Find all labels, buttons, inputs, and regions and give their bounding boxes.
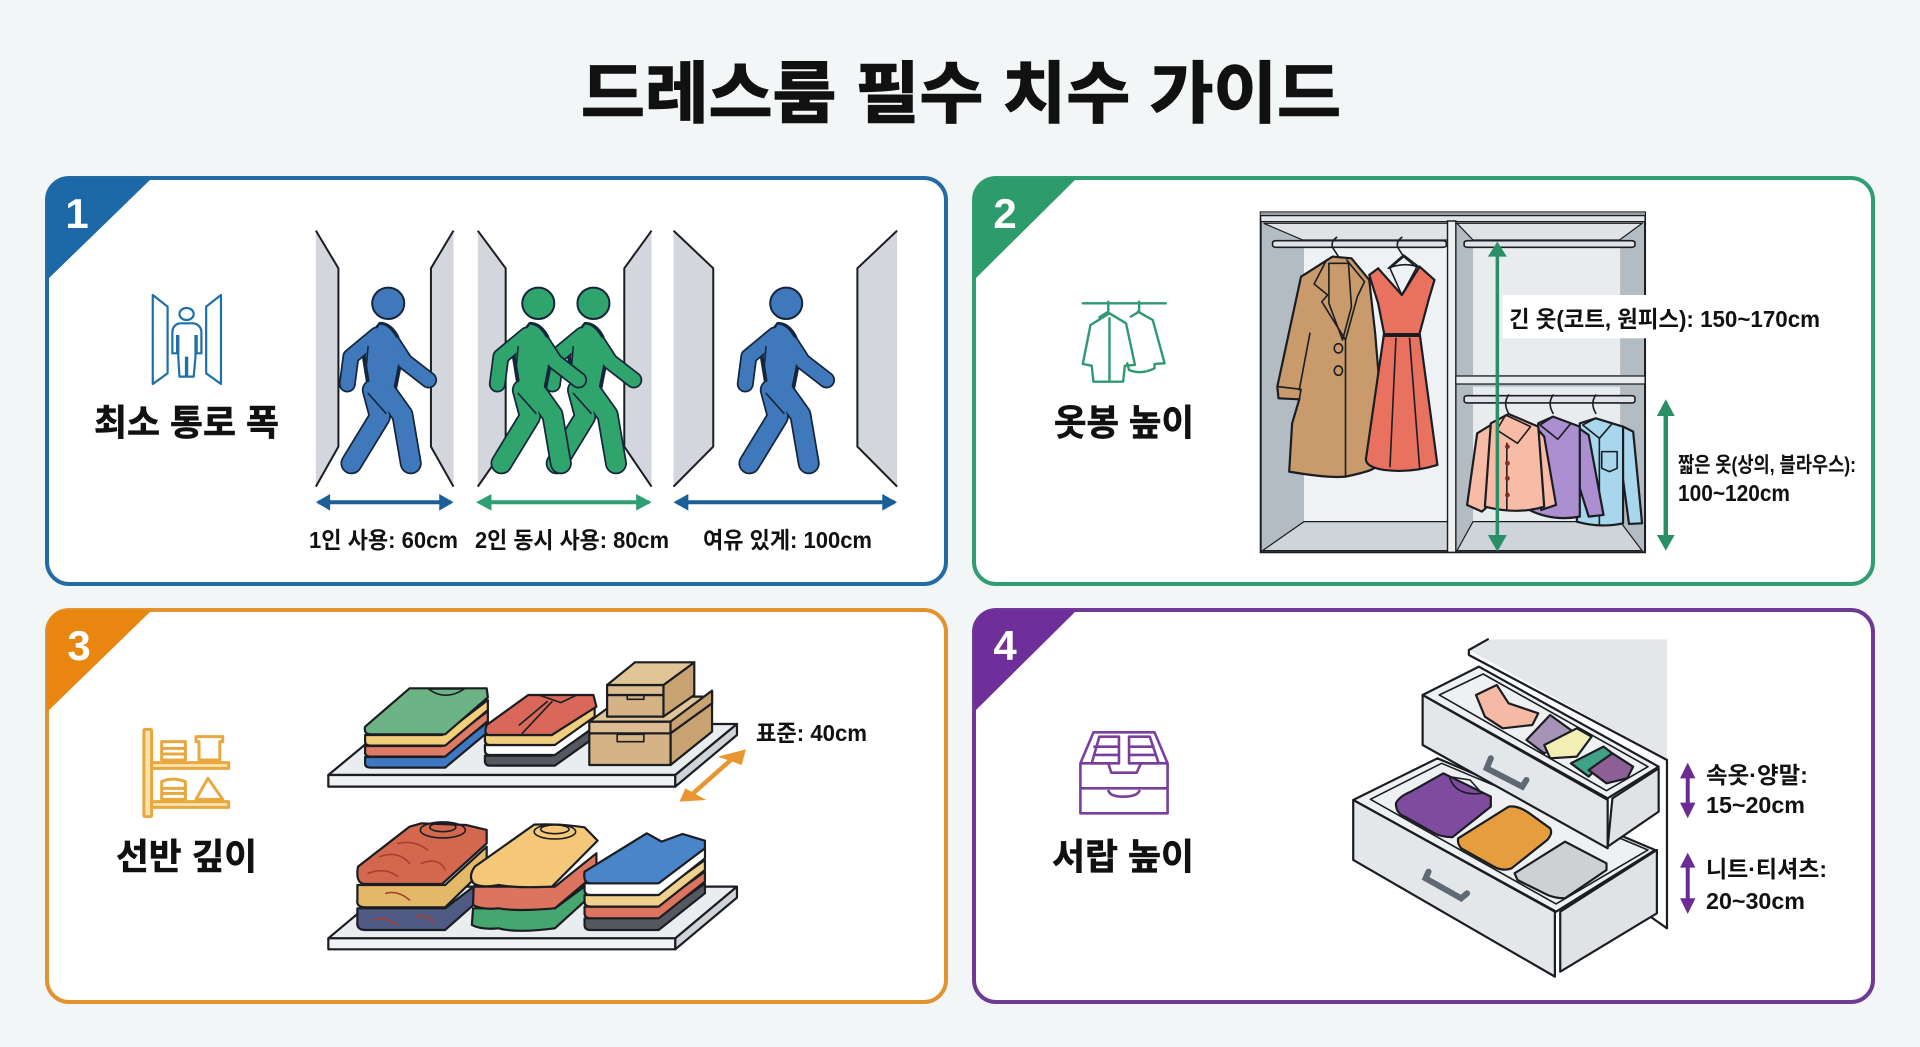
panel 4: drawer height — [974, 610, 1873, 1002]
panel 2 heading: 옷봉 높이 — [1054, 402, 1194, 443]
coat — [1277, 237, 1404, 477]
label: 100cm: 여유 있게: 100cm — [703, 527, 872, 553]
panel 2 icon: clothes on rod — [1083, 302, 1166, 382]
lower shelf with knits — [328, 822, 737, 949]
depth arrow — [679, 749, 746, 802]
panel 2 number badge: 2 — [993, 190, 1017, 237]
label: short clothes: 100~120cm — [1678, 480, 1790, 506]
aisle 3: spacious 100cm — [674, 231, 897, 511]
label: short clothes: 짧은 옷(상의, 블라우스): — [1678, 454, 1856, 477]
panel 1 card — [47, 178, 946, 584]
drawer illustration — [1353, 639, 1695, 977]
label: knits and t-shirts: 20~30cm — [1706, 888, 1805, 914]
panel 3 number badge: 3 — [67, 622, 91, 669]
short shirts — [1467, 395, 1642, 525]
lower shelf board — [328, 887, 737, 949]
title: 드레스룸 필수 치수 가이드 — [581, 57, 1341, 132]
panel 1: minimum aisle width — [47, 178, 946, 584]
wardrobe illustration — [1261, 212, 1675, 552]
label: 80cm: 2인 동시 사용: 80cm — [475, 527, 669, 553]
wardrobe frame — [1261, 212, 1645, 552]
cabinet — [1469, 639, 1667, 928]
upper drawer — [1423, 667, 1659, 848]
arrow: long clothes height — [1488, 242, 1507, 552]
upper shelf board — [328, 724, 737, 787]
knit stack — [357, 822, 487, 930]
panel 4 heading: 서랍 높이 — [1052, 836, 1194, 877]
panel 4 number badge — [974, 610, 1077, 712]
storage boxes — [589, 662, 712, 765]
panel 1 icon: person in aisle — [153, 295, 221, 384]
white label backing — [1503, 295, 1648, 338]
yellow sweater stack — [471, 824, 598, 931]
panel 3: shelf depth — [47, 610, 946, 1002]
label: 60cm: 1인 사용: 60cm — [309, 527, 458, 553]
panel 1 heading: 최소 통로 폭 — [94, 402, 279, 443]
panel 3 card — [47, 610, 946, 1002]
label: 40cm: 표준: 40cm — [756, 720, 867, 746]
label: underwear and socks: 15~20cm — [1706, 792, 1805, 818]
panel 4 icon: drawer — [1080, 732, 1168, 813]
arrow: knits and t-shirts — [1680, 853, 1695, 914]
panel 1 number badge — [47, 178, 152, 280]
label: long clothes: 긴 옷(코트, 원피스): 150~170cm — [1509, 306, 1820, 332]
label: knits and t-shirts — [1706, 856, 1827, 914]
panel 2 number badge — [974, 178, 1077, 280]
dress — [1366, 255, 1437, 471]
lower drawer — [1353, 758, 1657, 977]
blue shirt stack — [584, 833, 705, 930]
pink shirt — [1467, 414, 1556, 512]
purple shirt — [1529, 417, 1604, 518]
blue shirt — [1577, 418, 1642, 525]
panel 2 card — [974, 178, 1873, 584]
panel 3 heading: 선반 깊이 — [116, 836, 257, 877]
panel 3 number badge — [47, 610, 152, 712]
label: short clothes — [1678, 454, 1856, 506]
label: underwear and socks — [1706, 762, 1808, 818]
panel 2: hanging rod height — [974, 178, 1873, 584]
label: underwear and socks: 속옷·양말: — [1706, 762, 1808, 788]
upper shelf with folded clothes and boxes — [328, 662, 737, 787]
aisle 1: one person 60cm — [316, 231, 453, 511]
panel 4 number badge: 4 — [993, 622, 1017, 669]
aisle 2: two people 80cm — [476, 231, 652, 511]
green stack — [365, 688, 488, 768]
panel 3 icon: shelf — [144, 729, 229, 817]
label: knits and t-shirts: 니트·티셔츠: — [1706, 856, 1827, 882]
arrow: short clothes height — [1657, 399, 1675, 551]
hanging rods — [1273, 241, 1635, 403]
panel 4 card — [974, 610, 1873, 1002]
arrow: underwear and socks — [1680, 763, 1695, 818]
panel 1 number badge: 1 — [65, 190, 89, 237]
red shirt stack — [485, 695, 596, 766]
